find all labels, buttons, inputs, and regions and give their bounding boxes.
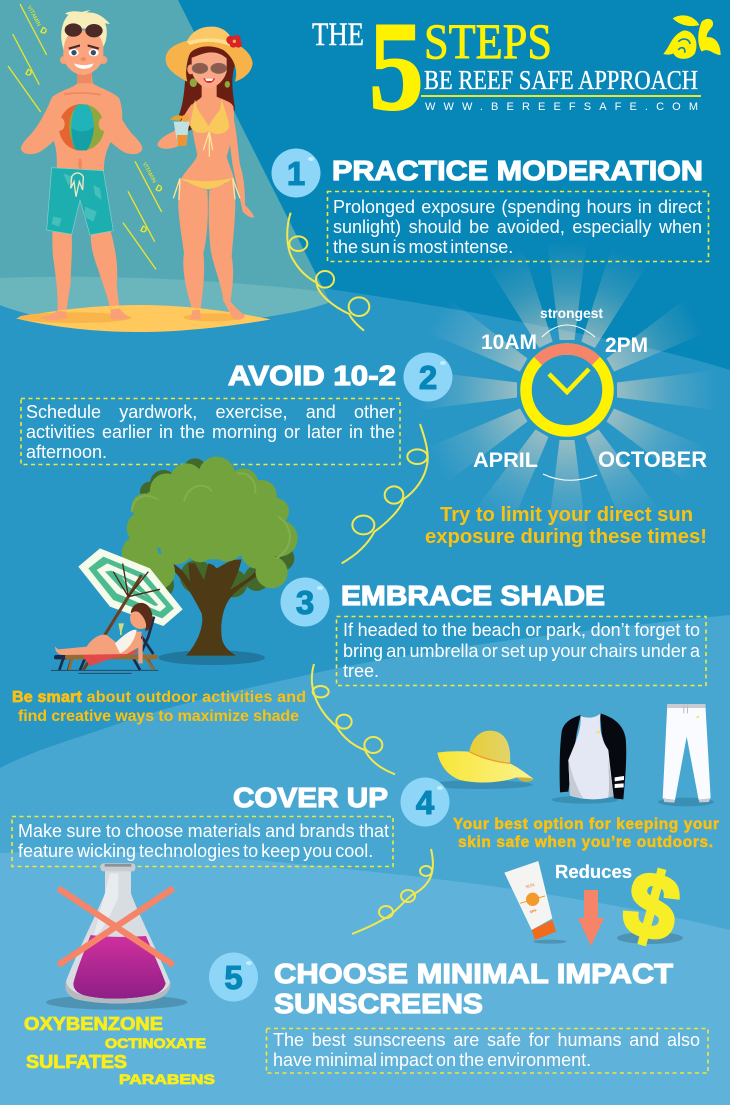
squiggle from step 3 to step 4 — [312, 664, 395, 774]
figure: man with beach ball — [21, 10, 142, 320]
red X — [58, 888, 173, 965]
man's legs — [40, 231, 129, 320]
step 5 number badge — [209, 952, 258, 1002]
man's swim shorts — [47, 168, 113, 235]
step 1 body text: sunlight) should be avoided, especially when — [333, 217, 702, 237]
sand island — [16, 302, 271, 332]
beach backdrop: teal light beam and hill — [0, 0, 330, 326]
logo: yellow reef wasp — [663, 15, 721, 59]
step 1 heading: PRACTICE MODERATION — [332, 155, 703, 186]
sun clock rays — [417, 240, 717, 540]
woman's sunhat — [166, 27, 253, 82]
vitamin D rays: D — [154, 182, 165, 195]
illustration: striped beach umbrella — [78, 548, 183, 670]
step 4 number badge — [400, 778, 450, 826]
tree canopy — [122, 457, 298, 590]
callout: be smart: Be smart about outdoor activities and — [12, 689, 306, 706]
vitamin D rays: VITAMIN — [26, 5, 41, 27]
sun clock — [526, 325, 608, 480]
callout: best option: skin safe when you’re outdoors. — [458, 834, 713, 851]
reclining body — [55, 608, 151, 663]
step 4 body text — [18, 821, 389, 861]
title: WWW.BEREEFSAFE.COM — [425, 101, 698, 113]
step 1 dashed box — [328, 192, 708, 262]
man's head — [60, 10, 110, 83]
step 1 body text — [333, 197, 702, 257]
lounger frame — [54, 617, 158, 670]
step 4 dashed box — [12, 816, 393, 866]
callout: best option: Your best option for keeping your — [453, 816, 719, 833]
step 2 number badge — [404, 352, 452, 402]
callout: be smart — [12, 689, 306, 725]
step 4 body text: Make sure to choose materials and brands that — [18, 821, 389, 841]
squiggle from step 1 to step 2 — [287, 213, 369, 331]
step 3 body text: tree. — [343, 661, 379, 681]
banned ingredient list: OXYBENZONE — [24, 1014, 163, 1034]
step 2 body text: afternoon. — [26, 442, 107, 462]
step 3 number badge: 3 — [296, 584, 314, 621]
illustration: tree with shade — [122, 457, 298, 665]
icon: white track pants — [658, 704, 714, 806]
step 2 dashed box — [21, 398, 400, 464]
step 4 body text: feature wicking technologies to keep you cool. — [18, 841, 373, 861]
label: reduces: Reduces — [555, 862, 632, 882]
icon: sunscreen tube: SPF — [529, 908, 538, 914]
step 5 heading: CHOOSE MINIMAL IMPACT — [274, 958, 673, 989]
banned ingredient list — [24, 1014, 215, 1087]
step 1 number badge — [272, 148, 320, 198]
callout: limit sun exposure — [425, 504, 707, 548]
flower on hat — [226, 35, 242, 48]
clock labels: 2PM — [605, 334, 648, 357]
woman's bikini — [173, 99, 240, 200]
icon: rash guard shirt — [552, 713, 626, 804]
step 2 body text — [26, 402, 395, 462]
callout: best option — [453, 816, 719, 851]
step 3 body text: If headed to the beach or park, don’t forget to — [343, 620, 700, 640]
step 2 body text: Schedule yardwork, exercise, and other — [26, 402, 395, 422]
step 1 number badge: 1 — [287, 155, 305, 192]
icon: yellow sun hat — [427, 731, 534, 789]
step 5 body text: The best sunscreens are safe for humans and also — [273, 1030, 700, 1050]
man's beach ball — [55, 104, 108, 151]
step 4 heading: COVER UP — [233, 782, 388, 813]
clock labels: 10AM — [481, 331, 537, 354]
figure: woman in bikini and sunhat — [157, 27, 254, 320]
icon: sunscreen tube — [504, 861, 567, 944]
step 1 body text: Prolonged exposure (spending hours in direct — [333, 197, 702, 217]
step 3 body text — [343, 620, 700, 681]
tree trunk — [163, 559, 256, 656]
step 3 dashed box — [336, 616, 706, 686]
step 5 dashed box — [266, 1028, 708, 1073]
vitamin D rays: VITAMIN — [141, 161, 157, 184]
step 3 heading: EMBRACE SHADE — [341, 580, 605, 611]
vitamin D rays: D — [39, 25, 49, 37]
step 2 number badge: 2 — [419, 359, 437, 396]
feet over the sand — [40, 302, 245, 320]
step 3 body text: bring an umbrella or set up your chairs under a — [343, 640, 700, 660]
man's torso and arms — [21, 72, 142, 172]
icon: dollar sign: $ — [614, 851, 690, 963]
icon: sunscreen tube: SUN — [525, 882, 535, 889]
drink — [118, 623, 124, 635]
woman's hair — [178, 45, 235, 132]
squiggle from step 2 to step 3 — [342, 424, 428, 563]
step 5 body text — [273, 1030, 700, 1070]
step 5 body text: have minimal impact on the environment. — [273, 1050, 591, 1070]
illustration: woman relaxing on lounger — [51, 603, 158, 673]
step 2 body text: activities earlier in the morning or later in the — [26, 422, 395, 442]
clock labels: OCTOBER — [598, 447, 707, 472]
title — [312, 0, 701, 137]
flask liquid — [73, 935, 166, 999]
step 5 heading: SUNSCREENS — [274, 988, 483, 1019]
step 4 number badge: 4 — [416, 784, 435, 821]
callout: limit sun exposure: exposure during these times! — [425, 526, 707, 548]
flask glass — [65, 870, 170, 1003]
banned ingredient list: OCTINOXATE — [105, 1035, 206, 1051]
woman's face and sunglasses — [187, 43, 235, 88]
vitamin D rays — [8, 4, 165, 269]
step 3 number badge — [280, 578, 330, 626]
step 1 body text: the sun is most intense. — [333, 237, 513, 257]
squiggle from step 4 to step 5 — [352, 849, 433, 934]
woman's cocktail glass — [170, 115, 189, 146]
reclining woman's hair — [131, 603, 152, 631]
step 2 heading: AVOID 10-2 — [228, 360, 396, 391]
clock labels — [473, 306, 707, 472]
clock labels: strongest — [540, 306, 604, 321]
tree back foliage — [140, 458, 294, 599]
callout: limit sun exposure: Try to limit your direct sun — [440, 504, 693, 526]
title: THE — [312, 17, 364, 53]
arrow: down — [578, 890, 604, 946]
towel — [82, 630, 145, 666]
woman's body — [157, 85, 254, 320]
vitamin D rays: D — [24, 67, 34, 79]
illustration: crossed-out chemical flask — [46, 863, 187, 1010]
title: STEPS — [424, 13, 552, 69]
step 5 number badge: 5 — [224, 959, 243, 996]
clock labels: APRIL — [473, 448, 538, 472]
banned ingredient list: SULFATES — [26, 1052, 127, 1072]
vitamin D rays: D — [139, 223, 149, 236]
banned ingredient list: PARABENS — [119, 1071, 215, 1087]
step 5 heading — [274, 958, 673, 1019]
callout: be smart: find creative ways to maximize shade — [18, 708, 299, 725]
